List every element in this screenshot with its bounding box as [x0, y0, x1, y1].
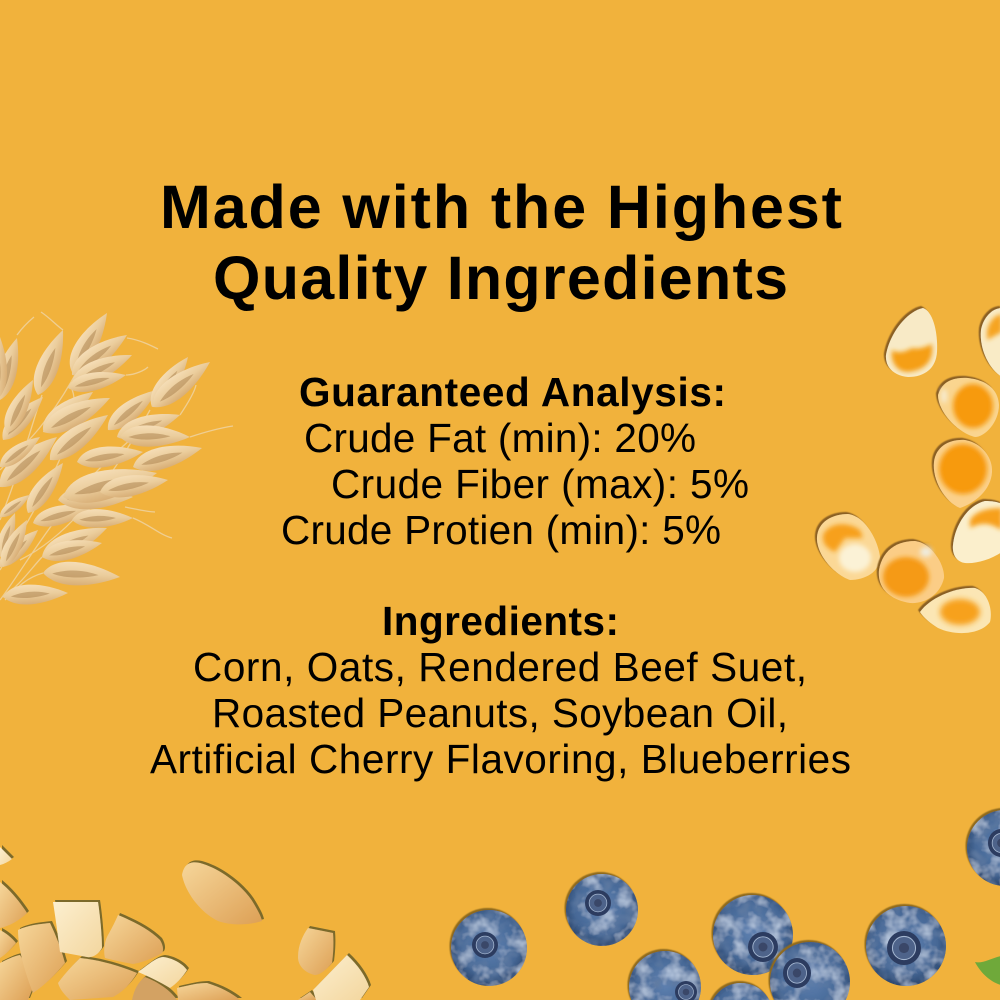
ingredients text block: Roasted Peanuts, Soybean Oil, — [212, 690, 788, 736]
title: Made with the Highest — [160, 173, 842, 241]
illustration: peanuts — [0, 847, 369, 1000]
ingredients text block: Ingredients: — [382, 598, 619, 644]
corn kernel 2 — [981, 308, 1000, 377]
title: Quality Ingredients — [213, 244, 788, 312]
corn kernel 6 — [817, 514, 880, 580]
blueberry 5 — [629, 951, 701, 1000]
blueberry 4 — [770, 942, 850, 1000]
blueberry 7 — [866, 906, 946, 986]
blueberry 2 — [566, 874, 638, 946]
ingredients text block: Corn, Oats, Rendered Beef Suet, — [193, 644, 807, 690]
illustration: corn kernels — [817, 308, 1000, 633]
guaranteed analysis text block: Crude Protien (min): 5% — [281, 507, 721, 553]
illustration: oat sprig — [0, 307, 233, 606]
corn kernel 3 — [938, 378, 999, 437]
guaranteed analysis text block — [281, 369, 749, 553]
corn kernel 1 — [886, 308, 937, 377]
illustration: blueberries — [451, 810, 1000, 1000]
whole peanut — [182, 862, 262, 924]
corn kernel 5 — [953, 501, 1000, 563]
green leaf — [975, 956, 1000, 985]
ingredients text block — [150, 598, 851, 782]
blueberry 8 — [967, 810, 1000, 886]
blueberry 3 — [713, 895, 793, 975]
blueberry 1 — [451, 910, 527, 986]
corn kernel 8 — [920, 588, 991, 633]
title — [160, 173, 842, 312]
guaranteed analysis text block: Crude Fiber (max): 5% — [331, 461, 749, 507]
peanut chunks left edge — [0, 847, 240, 1000]
blueberry 6 — [709, 983, 773, 1000]
ingredients text block: Artificial Cherry Flavoring, Blueberries — [150, 736, 851, 782]
corn kernel 7 — [879, 541, 944, 603]
peanut chunks right — [298, 928, 369, 1000]
guaranteed analysis text block: Guaranteed Analysis: — [299, 369, 726, 415]
corn kernel 4 — [934, 440, 992, 508]
guaranteed analysis text block: Crude Fat (min): 20% — [304, 415, 696, 461]
